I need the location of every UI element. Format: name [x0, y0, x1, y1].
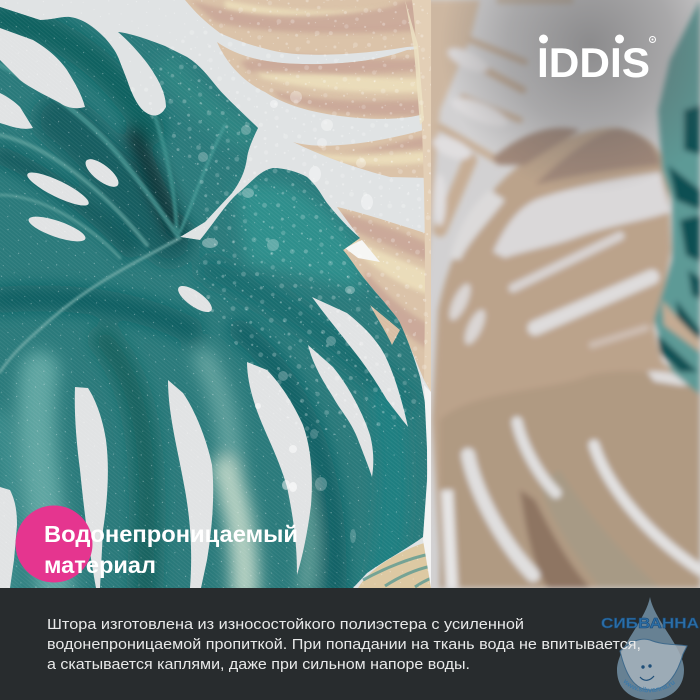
sharp area of curtain — [0, 0, 445, 590]
body text: водонепроницаемой пропиткой. При попадании на ткань вода не впитывается, — [47, 636, 641, 653]
blurred teal leaf at right edge — [654, 0, 700, 395]
right panel: blurred curtain fold — [425, 0, 700, 588]
water droplets — [0, 0, 440, 588]
leaf tan insert — [370, 305, 400, 345]
watermark bathtub — [620, 639, 687, 690]
blurred tan leaf upper left — [431, 0, 574, 254]
heading — [44, 521, 298, 578]
body text: Штора изготовлена из износостойкого полиэстера с усиленной — [47, 616, 524, 633]
small tan leaf bottom right — [358, 543, 431, 588]
fabric weave — [0, 0, 431, 588]
logo: iddis: IDDIS — [537, 39, 650, 86]
leaf dark brown patches — [492, 128, 660, 185]
pink circle accent — [16, 506, 92, 582]
leaf light slits — [493, 172, 670, 258]
body text — [47, 616, 641, 673]
leaf holes — [0, 28, 408, 588]
teal monstera leaf — [0, 0, 431, 590]
heading: материал — [44, 552, 156, 578]
white edge strip beside leaf — [423, 385, 431, 588]
watermark name: СИБВАННА — [601, 616, 700, 632]
watermark url: www.sibvanna.ru — [624, 679, 675, 692]
leaf ribs — [0, 60, 225, 372]
background: light curtain fabric — [0, 0, 431, 588]
leaf shading bands — [0, 18, 400, 590]
watermark face — [640, 665, 654, 680]
logo shade — [452, 0, 700, 180]
bottom dark panel — [0, 588, 700, 700]
tan leaf light bands — [225, 0, 431, 295]
tan leaf behind teal leaf — [180, 0, 431, 390]
watermark: sibvanna — [601, 597, 700, 700]
tan leaf pink bands — [190, 0, 431, 350]
body text: а скатывается каплями, даже при сильном напоре воды. — [47, 656, 470, 673]
blurred tan leaf main — [431, 126, 674, 540]
tan leaf fold edge and white slits — [345, 0, 431, 392]
watermark drop — [617, 597, 684, 700]
heading: Водонепроницаемый — [44, 521, 298, 547]
